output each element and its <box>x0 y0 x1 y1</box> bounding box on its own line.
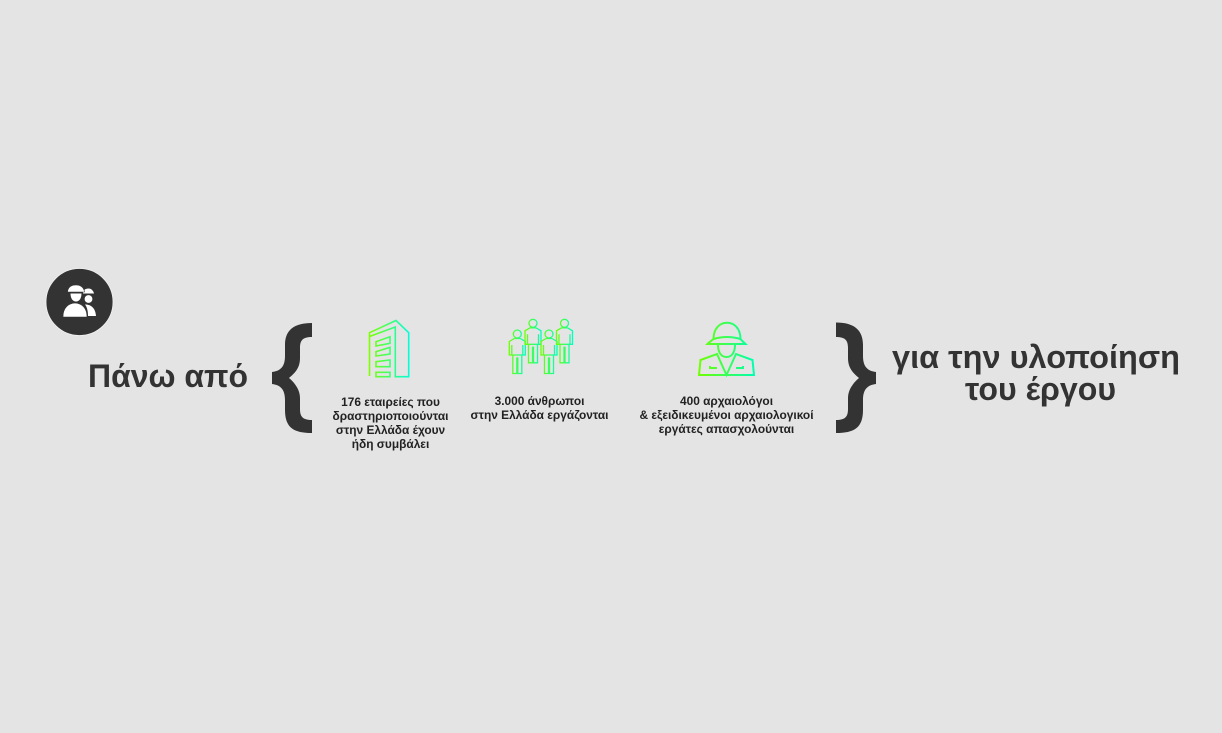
back worker <box>83 288 96 316</box>
text: archaeologists caption: 400 αρχαιολόγοι <box>680 394 773 408</box>
text: companies caption: στην Ελλάδα έχουν <box>336 423 446 437</box>
front worker <box>63 285 87 317</box>
panel: companies <box>333 320 448 451</box>
panel: people <box>471 319 608 422</box>
text: people caption: 3.000 άνθρωποι <box>495 394 584 408</box>
heading: right phrase: για την υλοποίηση <box>892 339 1180 375</box>
text: companies caption: δραστηριοποιούνται <box>333 409 448 423</box>
heading: left phrase: Πάνω από <box>88 358 248 394</box>
text: archaeologists caption: & εξειδικευμένοι αρχαιολογικοί <box>639 408 814 422</box>
icon: four people <box>509 319 572 374</box>
text: people caption: στην Ελλάδα εργάζονται <box>471 408 608 422</box>
left brace <box>272 323 312 433</box>
icon: archaeologist <box>699 323 754 375</box>
heading: right phrase <box>892 339 1180 407</box>
icon: workers badge <box>46 268 113 336</box>
text: companies caption: ήδη συμβάλει <box>352 437 429 451</box>
heading: right phrase: του έργου <box>965 371 1116 407</box>
text: companies caption: 176 εταιρείες που <box>341 395 440 409</box>
right brace <box>836 322 876 433</box>
panel: archaeologists <box>639 323 814 436</box>
text: archaeologists caption: εργάτες απασχολούνται <box>659 422 794 436</box>
icon: building <box>370 320 409 377</box>
